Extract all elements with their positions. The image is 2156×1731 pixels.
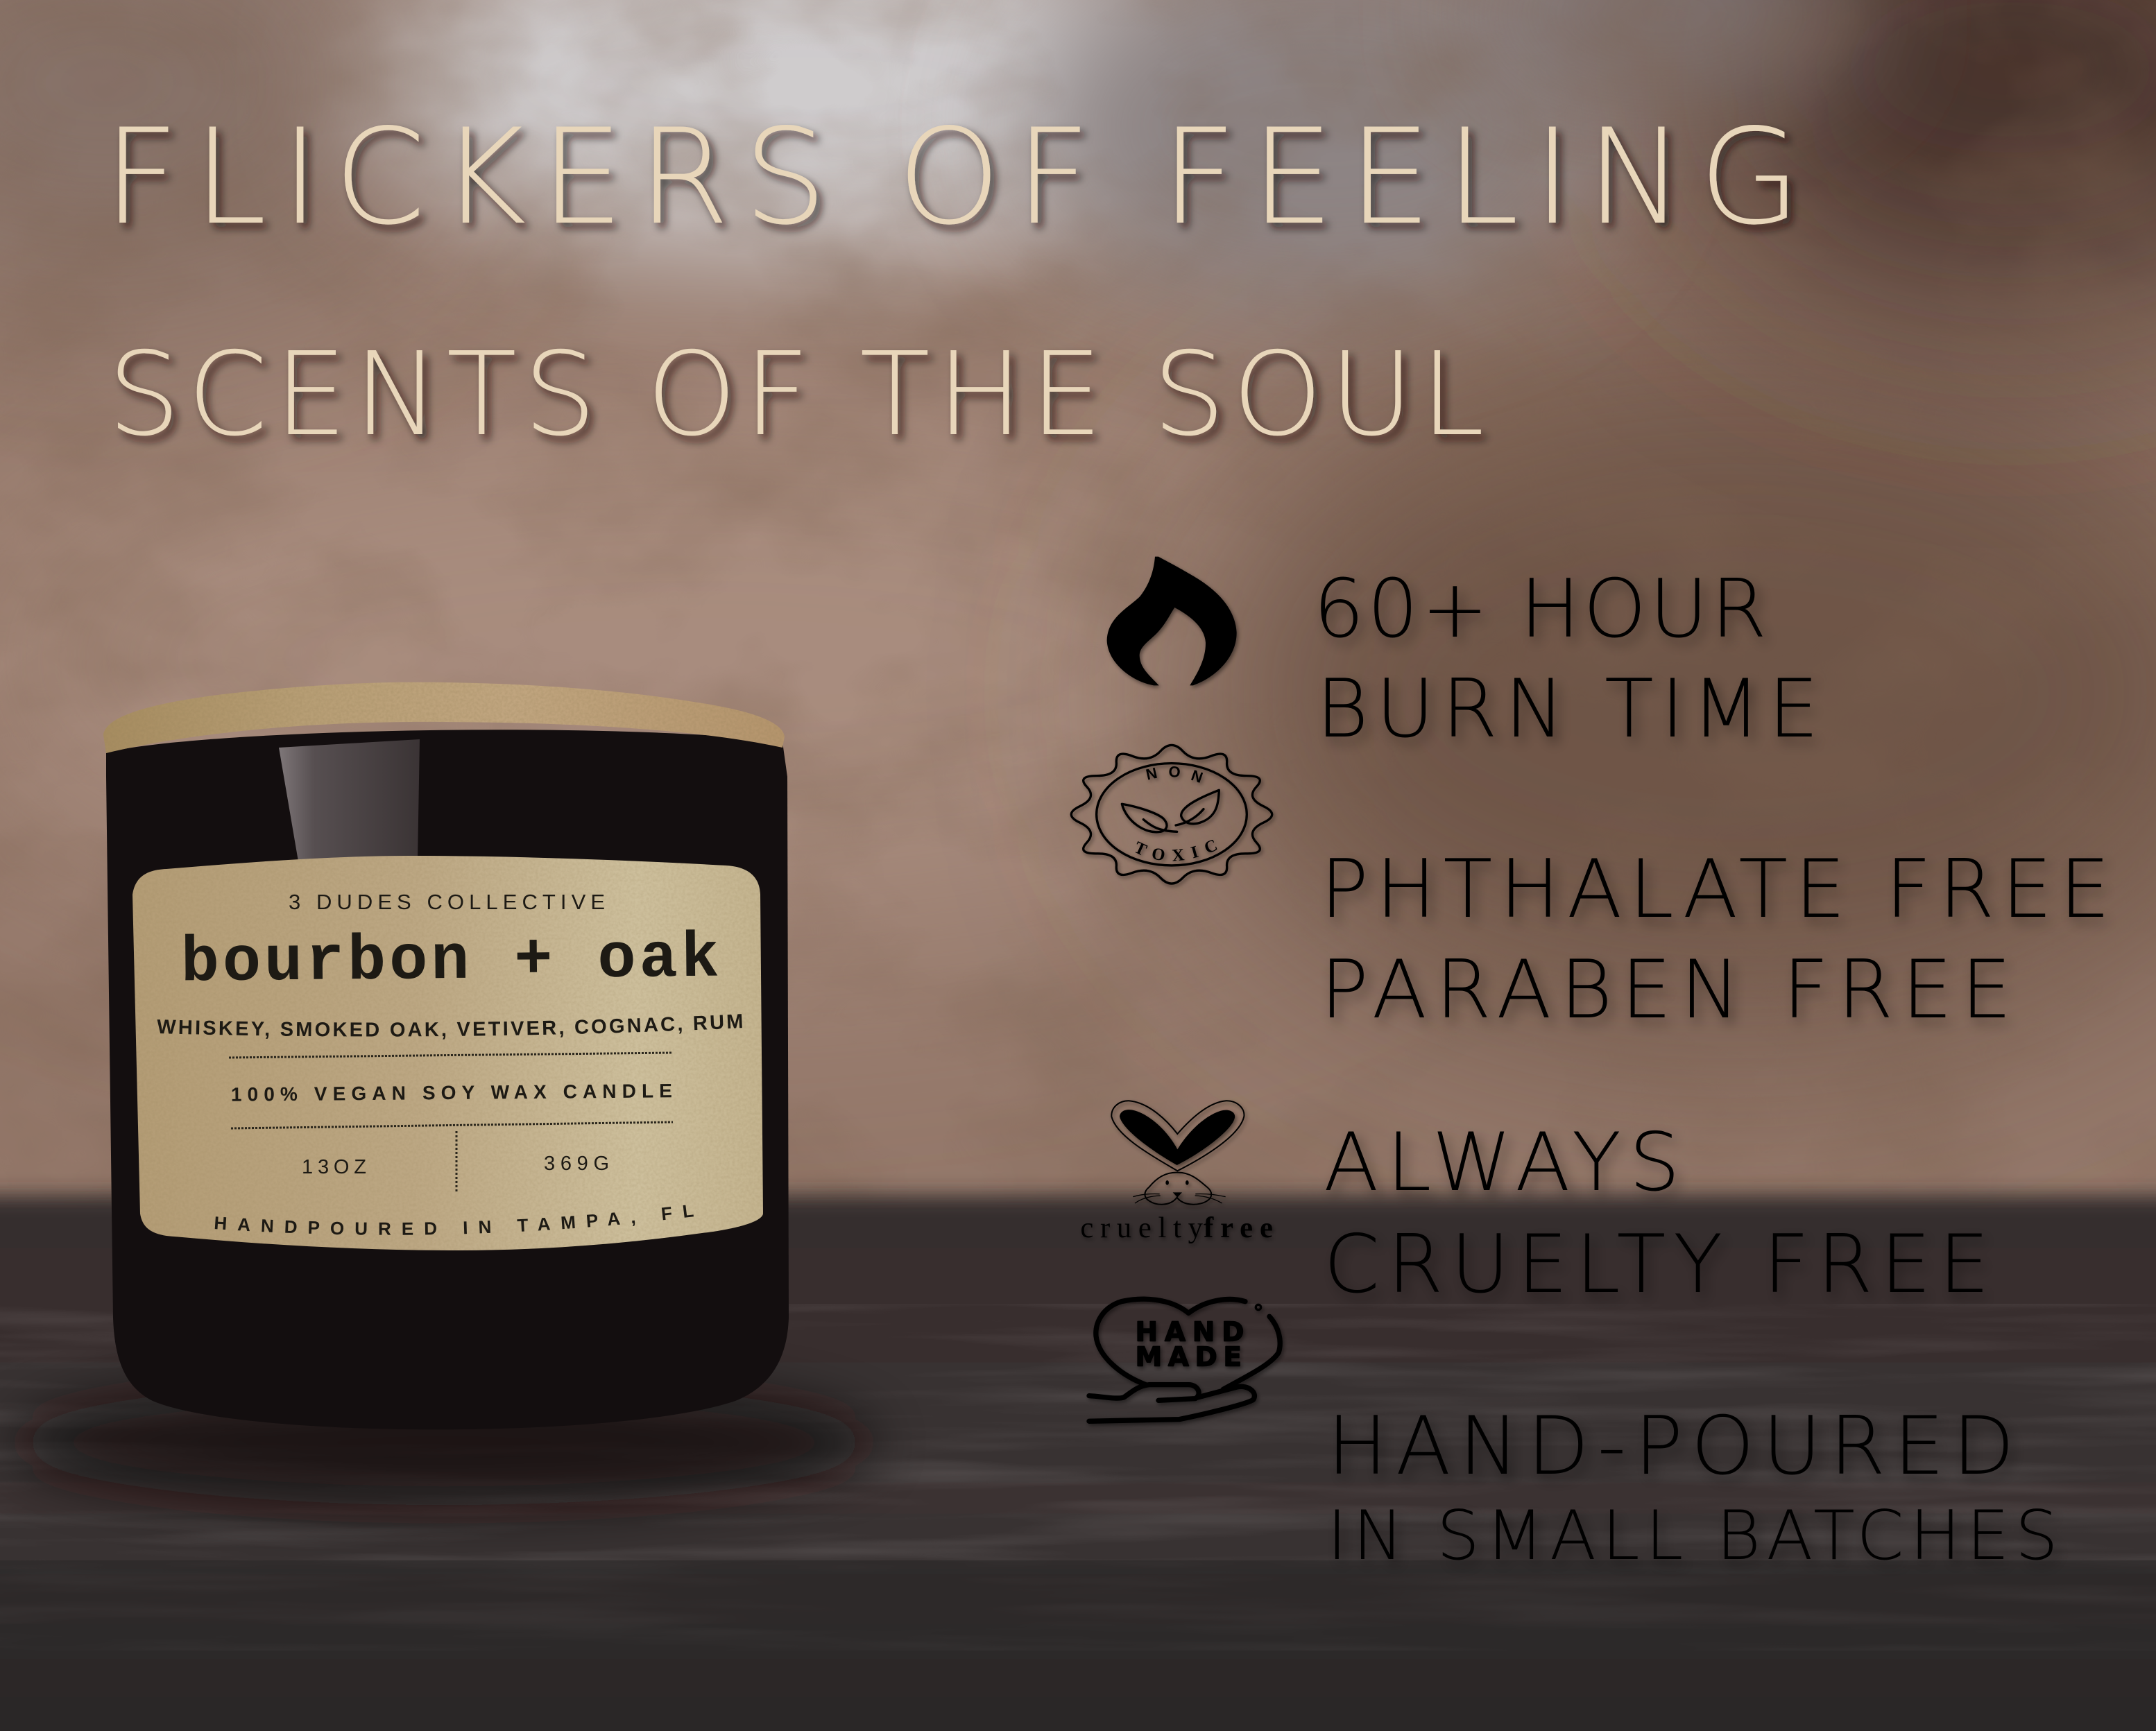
label scent name: bourbon + oak	[180, 922, 719, 999]
icon: flame	[1107, 557, 1237, 685]
icon: hand made heart: HAND	[1136, 1316, 1244, 1347]
glass reflection	[279, 739, 420, 861]
dotted divider	[231, 1122, 673, 1128]
icon: cruelty free bunny: free	[1204, 1212, 1273, 1244]
title line 2: SCENTS OF THE SOUL	[108, 328, 1485, 462]
hand poured	[1327, 1400, 2058, 1576]
icon: non toxic badge: TOXIC	[1131, 836, 1220, 866]
product: candle jar	[103, 682, 789, 1429]
phthalate paraben free	[1320, 843, 2110, 1037]
dotted vertical divider	[455, 1131, 458, 1191]
icon: cruelty free bunny: cruelty	[1080, 1212, 1204, 1244]
title line 1: FLICKERS OF FEELING	[103, 101, 1801, 254]
label wax: 100% VEGAN SOY WAX CANDLE	[231, 1080, 672, 1105]
burn time: BURN TIME	[1316, 662, 1819, 756]
label notes: WHISKEY, SMOKED OAK, VETIVER, COGNAC, RUM	[157, 1014, 742, 1040]
cruelty free: CRUELTY FREE	[1324, 1218, 1990, 1311]
bamboo lid	[103, 682, 785, 753]
icon: hand made heart: MADE	[1136, 1341, 1242, 1372]
title	[103, 101, 1801, 462]
hand poured: HAND-POURED	[1327, 1400, 2014, 1493]
phthalate paraben free: PHTHALATE FREE	[1320, 843, 2110, 936]
label origin: HANDPOURED IN TAMPA, FL	[215, 1205, 694, 1235]
jar body	[106, 730, 789, 1429]
burn time: 60+ HOUR	[1313, 562, 1767, 656]
icon: non toxic badge: NON	[1145, 763, 1205, 786]
cruelty free: ALWAYS	[1324, 1116, 1680, 1209]
icon: cruelty free bunny	[1080, 1101, 1273, 1244]
phthalate paraben free: PARABEN FREE	[1320, 943, 2012, 1037]
kraft label	[132, 856, 763, 1250]
feature list text	[1313, 562, 2110, 1576]
cruelty free	[1324, 1116, 1990, 1311]
icon: non toxic badge	[1071, 745, 1272, 884]
hand poured: IN SMALL BATCHES	[1327, 1497, 2058, 1576]
burn time	[1313, 562, 1819, 756]
label weight oz: 13OZ	[302, 1156, 366, 1178]
label weight g: 369G	[544, 1153, 609, 1175]
icon: hand made heart	[1089, 1299, 1280, 1421]
dotted divider	[229, 1053, 673, 1058]
label brand: 3 DUDES COLLECTIVE	[289, 890, 605, 914]
